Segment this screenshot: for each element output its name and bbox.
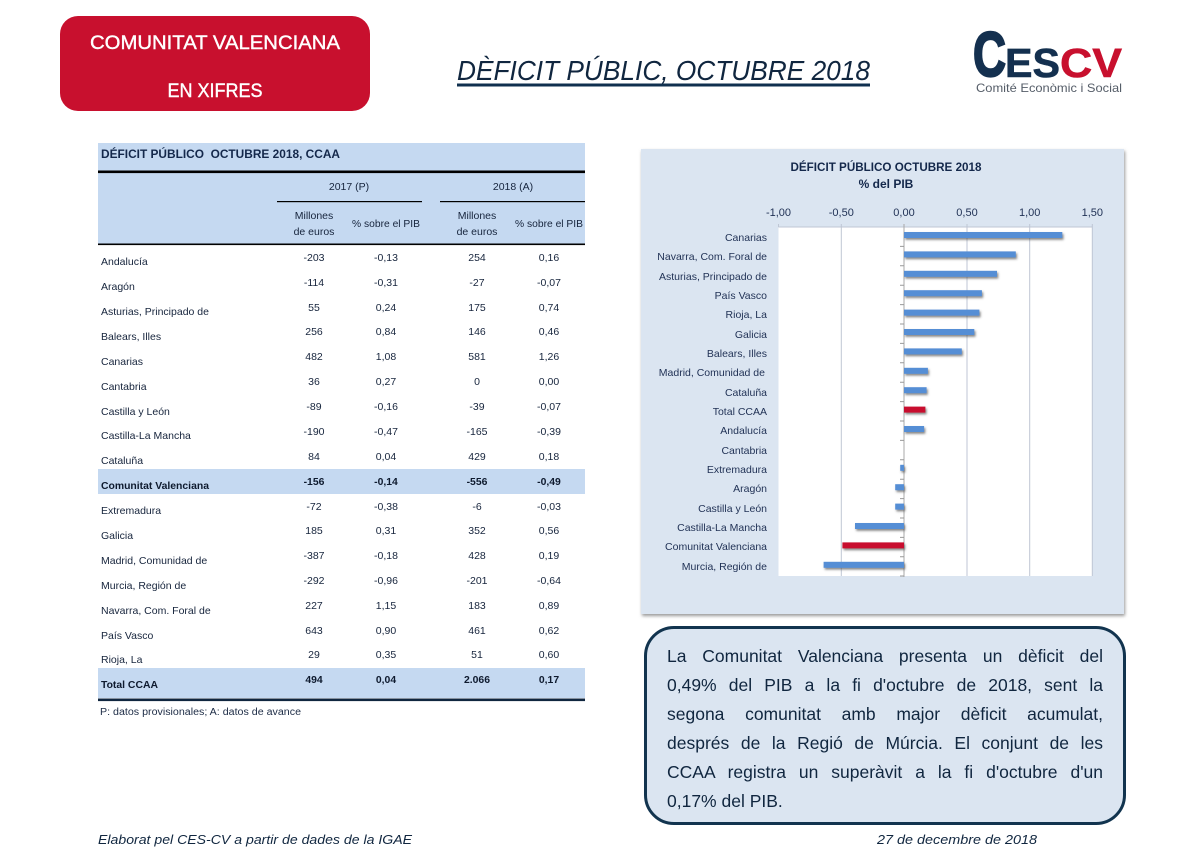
column: 2017 millones: -114 [304, 277, 324, 289]
x axis labels: 1,50 [1082, 207, 1103, 219]
row labels: Extremadura [101, 505, 161, 517]
table header [98, 143, 585, 245]
row labels: Aragón [101, 281, 135, 293]
x axis labels: 0,00 [893, 207, 915, 219]
logo: CESCV: Comité Econòmic i Social [976, 81, 1122, 95]
column: 2018 % PIB: -0,07 [537, 277, 561, 289]
category labels: Rioja, La [726, 309, 767, 321]
column: 2018 millones: 2.066 [464, 675, 490, 686]
footer: date: 27 de decembre de 2018 [876, 832, 1038, 847]
category labels [657, 232, 767, 573]
column: 2018 % PIB: 0,74 [539, 302, 559, 314]
chart title: DÉFICIT PÚBLICO OCTUBRE 2018 [790, 159, 982, 174]
column: 2017 % PIB: 0,84 [376, 326, 396, 338]
column: 2018 millones: 428 [468, 550, 486, 562]
row labels: Murcia, Región de [101, 580, 186, 592]
x axis labels [766, 207, 1103, 219]
column: 2017 millones: -89 [306, 401, 322, 413]
column: 2017 % PIB: 1,08 [376, 351, 396, 363]
column: 2018 millones: -201 [466, 575, 488, 587]
row labels: Asturias, Principado de [101, 306, 209, 318]
column: 2017 % PIB: -0,13 [374, 252, 398, 264]
column: 2017 millones: -72 [306, 501, 322, 513]
row labels: Galicia [101, 530, 133, 542]
column: 2017 % PIB: -0,47 [374, 426, 398, 438]
category labels: Canarias [725, 232, 767, 244]
column: 2017 % PIB: 0,04 [376, 675, 396, 686]
column: 2017 % PIB: 0,04 [376, 451, 396, 463]
column: 2017 % PIB: 0,31 [376, 525, 396, 537]
column: 2018 millones: 461 [468, 625, 486, 637]
callout: summary text: 0,17% del PIB. [667, 791, 783, 811]
column: 2018 % PIB: -0,49 [537, 477, 561, 488]
column: 2018 % PIB: 0,89 [539, 600, 559, 612]
chart title: % del PIB [859, 177, 914, 191]
column: 2017 % PIB: 0,35 [376, 649, 396, 661]
category labels: País Vasco [715, 290, 767, 302]
x axis labels: -1,00 [766, 207, 791, 219]
category labels: Cataluña [725, 387, 767, 399]
panel: bar chart [641, 149, 1124, 614]
category labels: Madrid, Comunidad de [659, 367, 765, 379]
column: 2017 millones: -156 [304, 477, 325, 488]
footer: source: Elaborat pel CES-CV a partir de dades de la IGAE [98, 832, 412, 847]
title: DÈFICIT PÚBLIC, OCTUBRE 2018 [457, 55, 870, 86]
category labels: Asturias, Principado de [659, 271, 767, 283]
category labels: Murcia, Región de [682, 561, 767, 573]
column: 2018 millones [464, 252, 490, 686]
row labels: Balears, Illes [101, 331, 161, 343]
column: 2018 millones: 254 [468, 252, 486, 264]
column: 2017 millones [303, 252, 325, 686]
callout: summary text: La Comunitat Valenciana presenta un dèficit del [667, 646, 1103, 666]
column: 2017 % PIB: 1,15 [376, 600, 396, 612]
table header: DÉFICIT PÚBLICO OCTUBRE 2018, CCAA [101, 146, 340, 161]
column: 2018 millones: -6 [472, 501, 482, 513]
table header: de euros [294, 226, 334, 238]
column: 2018 % PIB: 1,26 [539, 351, 559, 363]
column: 2017 millones: 227 [305, 600, 323, 612]
highlighted row bands [98, 469, 585, 701]
column: 2017 millones: 643 [305, 625, 323, 637]
callout: summary text: segona comunitat amb major dèficit acumulat, [667, 704, 1103, 724]
logo: CESCV: CV [1060, 40, 1123, 86]
column: 2017 millones: -292 [303, 575, 325, 587]
table header: % sobre el PIB [352, 218, 420, 230]
table header: Millones [295, 210, 333, 222]
category labels: Castilla y León [698, 503, 767, 515]
row labels: País Vasco [101, 630, 153, 642]
column: 2017 % PIB: -0,96 [374, 575, 398, 587]
column: 2017 millones: 185 [305, 525, 323, 537]
category labels: Cantabria [721, 445, 767, 457]
column: 2017 millones: 256 [305, 326, 323, 338]
column: 2017 % PIB: -0,31 [374, 277, 398, 289]
badge: Comunitat Valenciana en xifres [60, 16, 370, 111]
column: 2017 % PIB: 0,24 [376, 302, 396, 314]
category labels: Balears, Illes [707, 348, 767, 360]
column: 2017 millones: 29 [308, 649, 320, 661]
column: 2018 % PIB: -0,64 [537, 575, 561, 587]
row labels: Castilla-La Mancha [101, 430, 191, 442]
column: 2017 millones: -387 [303, 550, 325, 562]
column: 2018 millones: 352 [468, 525, 486, 537]
column: 2017 % PIB: -0,38 [374, 501, 398, 513]
column: 2018 millones: -39 [469, 401, 485, 413]
row labels: Rioja, La [101, 654, 143, 666]
column: 2018 millones: 429 [468, 451, 486, 463]
callout: summary text: CCAA registra un superàvit a la fi d'octubre d'un [667, 762, 1103, 782]
badge: Comunitat Valenciana en xifres: EN XIFRES [168, 80, 262, 102]
column: 2018 % PIB: 0,17 [539, 675, 559, 686]
category labels: Extremadura [707, 464, 767, 476]
row labels: Canarias [101, 356, 143, 368]
x axis labels: 0,50 [956, 207, 978, 219]
column: 2018 % PIB: -0,03 [537, 501, 561, 513]
column: 2018 % PIB: 0,56 [539, 525, 559, 537]
column: 2017 % PIB [374, 252, 398, 686]
chart title [790, 159, 982, 191]
table header: % sobre el PIB [515, 218, 583, 230]
column: 2017 % PIB: -0,14 [374, 477, 398, 488]
column: 2017 % PIB: 0,27 [376, 376, 396, 388]
column: 2018 % PIB: 0,00 [539, 376, 559, 388]
category labels: Andalucía [720, 425, 767, 437]
callout: summary text: després de la Regió de Múrcia. El conjunt de les [667, 733, 1103, 753]
column: 2018 % PIB: -0,39 [537, 426, 561, 438]
column: 2017 millones: 494 [305, 675, 323, 686]
row labels: Navarra, Com. Foral de [101, 605, 211, 617]
column: 2017 millones: 55 [308, 302, 320, 314]
row labels: Total CCAA [101, 680, 158, 691]
column: 2018 millones: 51 [471, 649, 483, 661]
row labels [101, 256, 211, 691]
table header: de euros [457, 226, 497, 238]
column: 2017 % PIB: -0,18 [374, 550, 398, 562]
column: 2018 millones: 581 [468, 351, 486, 363]
column: 2018 millones: 183 [468, 600, 486, 612]
bars [824, 232, 1062, 568]
column: 2018 % PIB: 0,46 [539, 326, 559, 338]
column: 2018 millones: -165 [466, 426, 488, 438]
row labels: Castilla y León [101, 406, 170, 418]
badge: Comunitat Valenciana en xifres: COMUNITAT VALENCIANA [90, 32, 340, 54]
row labels: Cantabria [101, 381, 147, 393]
column: 2018 millones: -556 [467, 477, 488, 488]
table header: 2017 (P) [329, 181, 369, 193]
column: 2018 % PIB: 0,62 [539, 625, 559, 637]
column: 2018 % PIB: 0,16 [539, 252, 559, 264]
column: 2017 millones: -203 [303, 252, 325, 264]
logo: CESCV: ES [1005, 40, 1060, 86]
column: 2018 millones: 146 [468, 326, 486, 338]
column: 2017 millones: 84 [308, 451, 320, 463]
column: 2017 % PIB: -0,16 [374, 401, 398, 413]
logo: CESCV [973, 20, 1123, 95]
column: 2018 millones: 175 [468, 302, 486, 314]
column: 2018 millones: 0 [474, 376, 480, 388]
column: 2018 % PIB: 0,18 [539, 451, 559, 463]
category labels: Navarra, Com. Foral de [657, 251, 767, 263]
column: 2017 millones: 482 [305, 351, 323, 363]
row labels: Madrid, Comunidad de [101, 555, 207, 567]
callout: summary text: 0,49% del PIB a la fi d'octubre de 2018, sent la [667, 675, 1103, 695]
row labels: Andalucía [101, 256, 148, 268]
plot area and axes [778, 224, 1092, 577]
row labels: Comunitat Valenciana [101, 481, 209, 492]
x axis labels: 1,00 [1019, 207, 1040, 219]
column: 2017 % PIB: 0,90 [376, 625, 396, 637]
column: 2018 % PIB [537, 252, 561, 686]
category labels: Comunitat Valenciana [665, 541, 767, 553]
column: 2017 millones: 36 [308, 376, 320, 388]
category labels: Galicia [735, 329, 767, 341]
callout: summary text [644, 626, 1126, 825]
x axis labels: -0,50 [829, 207, 854, 219]
table header: Millones [458, 210, 496, 222]
logo: CESCV: C [973, 20, 1006, 90]
column: 2018 % PIB: 0,60 [539, 649, 559, 661]
table header: 2018 (A) [493, 181, 533, 193]
category labels: Castilla-La Mancha [677, 522, 767, 534]
table: déficit público CCAA [98, 143, 585, 718]
row labels: Cataluña [101, 455, 143, 467]
column: 2018 % PIB: -0,07 [537, 401, 561, 413]
category labels: Aragón [733, 483, 767, 495]
column: 2018 millones: -27 [469, 277, 485, 289]
table note: P: datos provisionales; A: datos de avance [100, 707, 301, 718]
column: 2018 % PIB: 0,19 [539, 550, 559, 562]
column: 2017 millones: -190 [303, 426, 325, 438]
category labels: Total CCAA [713, 406, 767, 418]
